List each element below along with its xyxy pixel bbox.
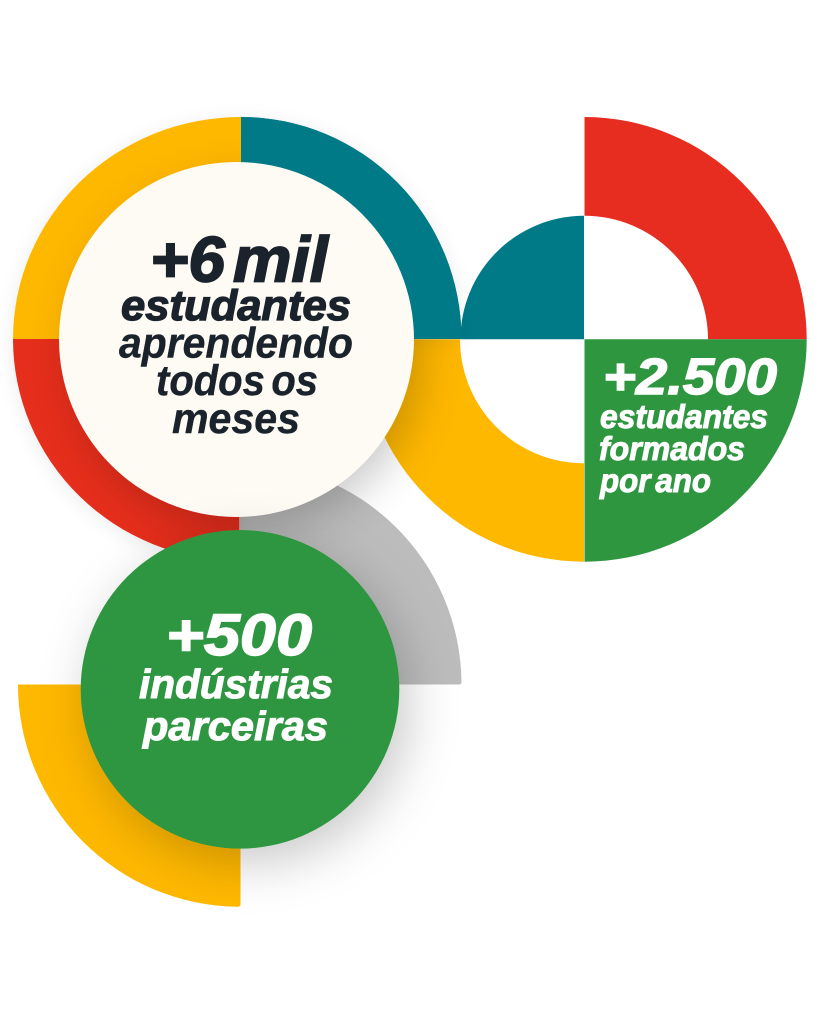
text: industrias parceiras: indústrias xyxy=(139,661,333,707)
panel: big coloured ring xyxy=(13,117,462,561)
text: estudantes aprendendo: todos os xyxy=(156,357,318,405)
gray quarter ring xyxy=(240,463,462,685)
text: estudantes formados: por ano xyxy=(599,462,711,499)
text: estudantes aprendendo: aprendendo xyxy=(119,320,353,368)
text: estudantes aprendendo: +6 mil xyxy=(150,224,329,296)
text: industrias parceiras: parceiras xyxy=(142,703,328,749)
teal ring segment xyxy=(241,117,462,339)
text: estudantes formados: formados xyxy=(599,430,745,467)
text: estudantes aprendendo: estudantes xyxy=(121,282,351,330)
text: industrias parceiras xyxy=(139,603,333,749)
text: estudantes formados: estudantes xyxy=(600,398,768,435)
red ring segment xyxy=(13,339,240,561)
panel: right semicircle composition xyxy=(362,117,807,562)
green quarter xyxy=(584,339,807,562)
text: estudantes formados: +2.500 xyxy=(603,348,777,405)
text: estudantes aprendendo xyxy=(119,224,353,443)
yellow ring segment xyxy=(13,117,241,339)
text: estudantes aprendendo: meses xyxy=(172,395,300,443)
teal ring overlay above shadow xyxy=(241,117,462,339)
red quarter ring xyxy=(584,117,807,339)
yellow lower quarter xyxy=(18,684,241,907)
teal quarter xyxy=(460,216,584,339)
big cream circle with text xyxy=(59,162,414,517)
text: estudantes formados xyxy=(599,348,777,499)
green circle with text xyxy=(81,530,399,849)
panel: lower quarter shapes xyxy=(18,463,462,907)
text: industrias parceiras: +500 xyxy=(166,603,312,668)
yellow quarter ring xyxy=(362,339,584,562)
